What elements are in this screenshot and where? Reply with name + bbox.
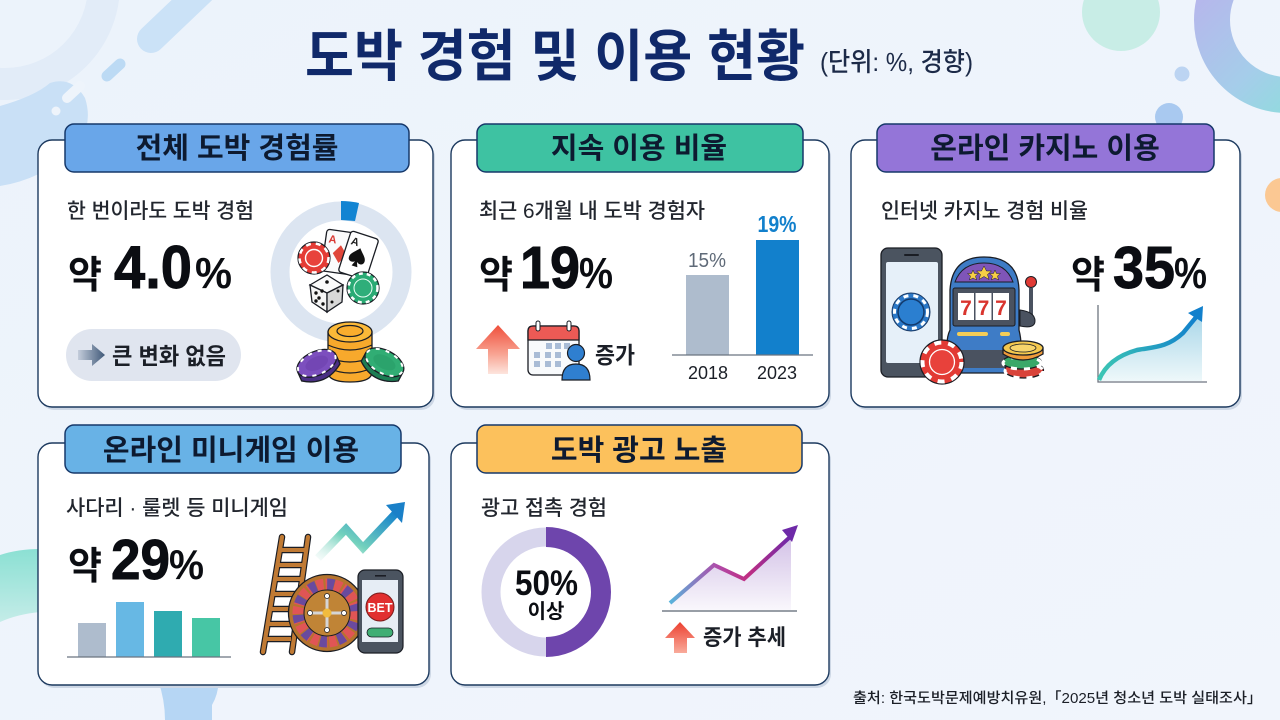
icon: red up arrow (476, 325, 520, 374)
stat: 35%: 약 (1071, 255, 1105, 297)
bar chart: 2018 vs 2023: 19% (758, 211, 796, 237)
icon: chip stack (293, 322, 409, 388)
icon: phone with bet button (358, 570, 403, 653)
icon: calendar and person (528, 321, 590, 380)
icon: slot machine: 7 (995, 297, 1007, 320)
line chart: rising (1098, 305, 1207, 382)
pill: no major change (66, 329, 241, 381)
stat: 29% (68, 528, 204, 592)
stat: 4.0%: % (195, 249, 232, 298)
bar chart: 2018 vs 2023: 15% (688, 250, 726, 272)
heading: continued use (477, 124, 803, 172)
icon: cards, dice and chips: A (328, 233, 337, 246)
stat: 4.0%: 4.0 (114, 234, 192, 301)
text: description: 인터넷 카지노 경험 비율 (881, 200, 1088, 223)
panel: gambling ad exposure (451, 425, 831, 688)
stat: 29%: 약 (68, 546, 102, 588)
icon: red up arrow (665, 622, 695, 653)
icon: slot machine (947, 257, 1036, 373)
stat: 19%: % (579, 249, 613, 298)
donut: 4 percent (280, 201, 402, 333)
bar chart: 2018 vs 2023: 2018 (688, 363, 728, 383)
stat: 35% (1071, 235, 1207, 301)
stat: 19% (479, 235, 613, 301)
icon: rising zigzag arrow (318, 502, 405, 558)
icon: phone with bet button: BET (368, 601, 393, 615)
icon: slot machine: 7 (978, 297, 989, 320)
icon: cards, dice and chips (298, 229, 379, 312)
text: description: 사다리 · 룰렛 등 미니게임 (66, 497, 288, 520)
text: description: 한 번이라도 도박 경험 (67, 200, 254, 223)
stat: 19%: 약 (479, 255, 513, 297)
bar chart: 2018 vs 2023 (672, 211, 813, 383)
text: increase: 증가 (595, 342, 635, 368)
unit note: (단위: %, 경향) (820, 47, 973, 77)
source note: 출처: 한국도박문제예방치유원,「2025년 청소년 도박 실태조사」 (853, 690, 1262, 707)
stat: 35%: % (1174, 249, 1207, 298)
stat: 4.0% (68, 234, 232, 301)
panel: continued use (451, 124, 831, 410)
panel: overall gambling experience (38, 124, 435, 410)
bar chart: 2018 vs 2023: 2023 (757, 363, 797, 383)
heading: overall experience (65, 124, 409, 172)
donut: 50 percent: 50% (515, 564, 578, 603)
icon: roulette wheel (288, 574, 366, 652)
pill: no major change: 큰 변화 없음 (112, 343, 226, 369)
heading: online mini games: 온라인 미니게임 이용 (103, 434, 359, 467)
title: 도박 경험 및 이용 현황 (305, 25, 805, 88)
stat: 19%: 19 (520, 235, 580, 301)
heading: online casino: 온라인 카지노 이용 (930, 132, 1160, 165)
bar chart: mini games (67, 602, 231, 657)
heading: ad exposure (477, 425, 802, 473)
stat: 29%: % (169, 541, 204, 588)
text: description: 최근 6개월 내 도박 경험자 (479, 200, 705, 223)
text: rising trend: 증가 추세 (703, 625, 786, 650)
panel: online mini games (38, 425, 431, 688)
text: description: 광고 접촉 경험 (481, 497, 607, 520)
donut: 50 percent: 이상 (528, 600, 564, 623)
panel: online casino (851, 124, 1242, 410)
icon: slot machine: 7 (960, 297, 972, 320)
heading: ad exposure: 도박 광고 노출 (551, 434, 727, 467)
stat: 35%: 35 (1113, 235, 1175, 301)
stat: 29%: 29 (111, 528, 170, 592)
icon: chip stack (1002, 341, 1044, 378)
line chart: rising ad trend (662, 525, 798, 611)
heading: overall experience: 전체 도박 경험률 (136, 132, 338, 165)
icon: red chip (920, 340, 964, 384)
icon: cards, dice and chips: A (349, 235, 361, 249)
heading: continued use: 지속 이용 비율 (551, 132, 727, 165)
icon: phone with chip (881, 248, 942, 377)
icon: ladder (263, 537, 308, 652)
heading: online casino (877, 124, 1214, 172)
donut: 50 percent (491, 527, 611, 657)
stat: 4.0%: 약 (68, 255, 102, 297)
heading: online mini games (65, 425, 401, 473)
